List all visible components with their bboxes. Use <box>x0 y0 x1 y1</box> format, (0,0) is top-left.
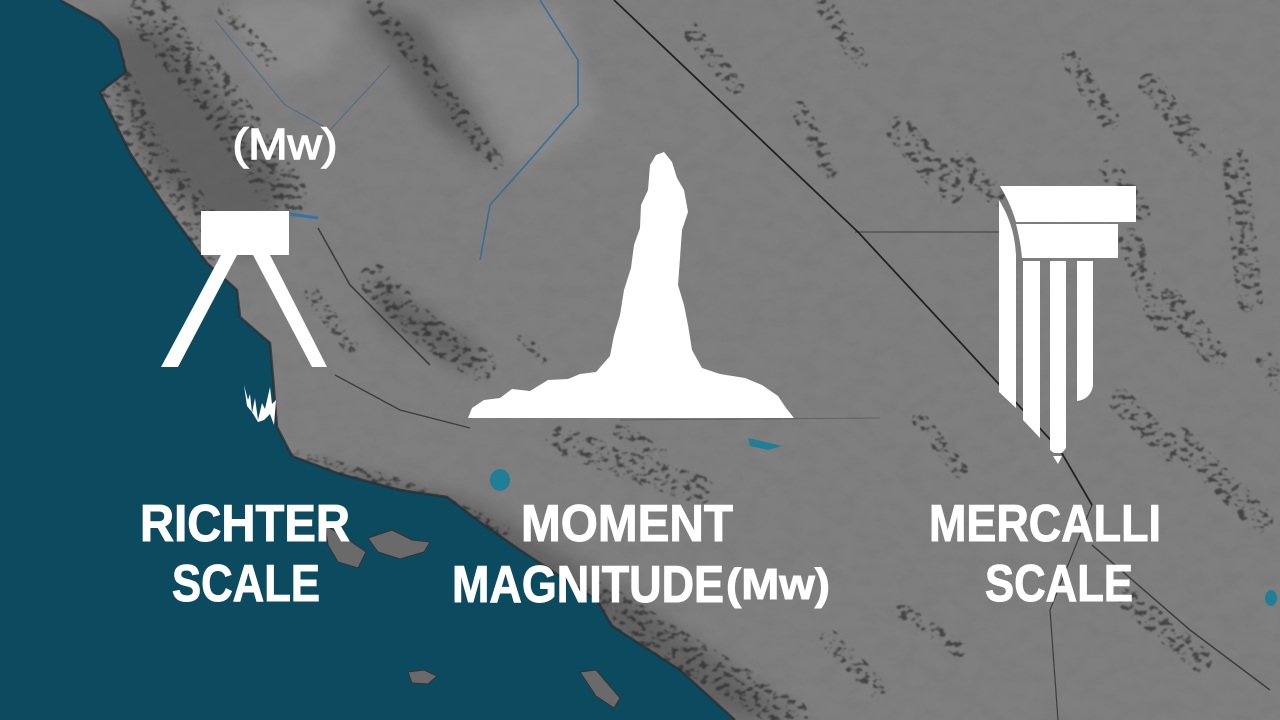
heading: Moment magnitude: MAGNITUDE <box>452 556 724 614</box>
islands <box>325 525 620 708</box>
label: (Mw): (Mw) <box>232 120 338 169</box>
heading: Moment magnitude <box>452 495 830 614</box>
heading: Richter scale <box>140 495 350 613</box>
icon: Richter scale seismograph <box>161 211 327 367</box>
heading: Moment magnitude: MOMENT <box>521 495 733 553</box>
heading: Richter scale: SCALE <box>172 555 320 613</box>
heading: Mercalli scale: SCALE <box>985 555 1133 613</box>
rivers and lakes <box>215 0 1277 606</box>
ocean <box>0 0 735 720</box>
icon: moment magnitude peak <box>468 152 794 418</box>
heading: Moment magnitude: (Mw) <box>726 560 830 609</box>
heading: Mercalli scale <box>929 495 1161 613</box>
icon: Mercalli scale column <box>999 186 1136 464</box>
small seismic trace glyph <box>244 385 276 425</box>
coastline <box>60 0 735 720</box>
heading: Richter scale: RICHTER <box>140 495 350 553</box>
state border lines <box>318 0 1270 720</box>
heading: Mercalli scale: MERCALLI <box>929 495 1161 553</box>
